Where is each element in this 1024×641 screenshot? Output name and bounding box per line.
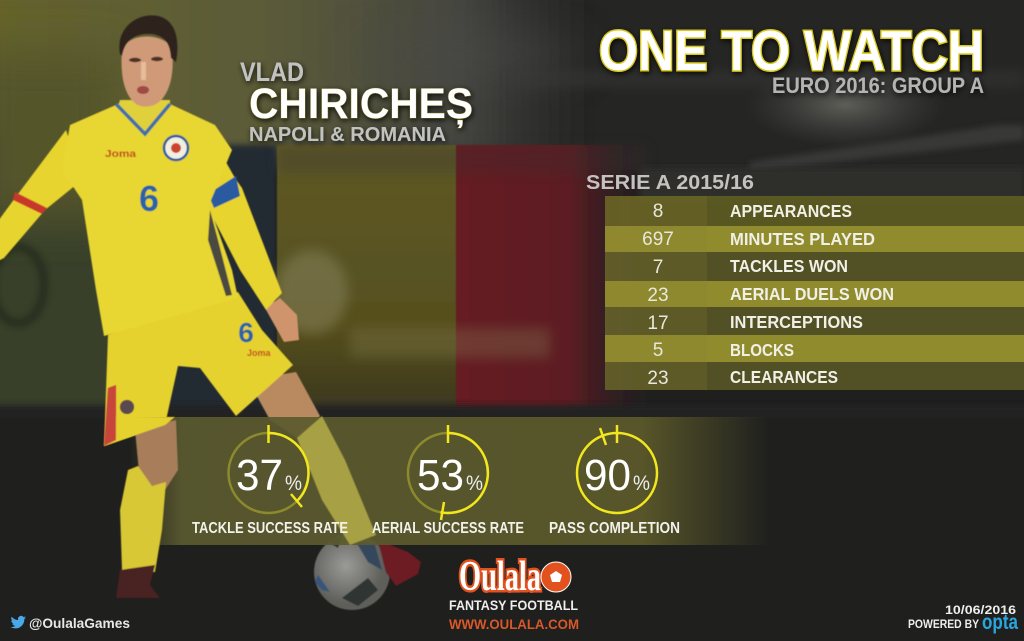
icon: twitter bird: [11, 616, 26, 628]
crest: [164, 136, 188, 160]
gauge: pass completion: PASS COMPLETION: [549, 520, 680, 537]
subtitle: EURO 2016: GROUP A: [772, 73, 984, 98]
surname: CHIRICHEȘ: [249, 80, 473, 128]
gauge: aerial success rate: AERIAL SUCCESS RATE: [372, 520, 524, 537]
stat labels: MINUTES PLAYED: [730, 229, 875, 249]
thigh: [135, 420, 178, 490]
tagline: FANTASY FOOTBALL: [449, 598, 578, 613]
logo football: [541, 562, 571, 592]
gauge: tackle success rate: 37: [236, 451, 283, 500]
far boot: [378, 540, 421, 586]
side panel: [208, 210, 232, 296]
gauge: aerial success rate: %: [466, 472, 483, 495]
boot: [116, 565, 160, 598]
stat values: 7: [653, 257, 663, 278]
stat values: 697: [642, 229, 674, 250]
stat labels: [730, 201, 894, 387]
gauge: pass completion: [549, 425, 680, 537]
gauge: tackle success rate: %: [285, 472, 302, 495]
shorts: [104, 292, 293, 446]
left arm: [0, 130, 82, 265]
captain armband: [208, 176, 240, 208]
gauge: pass completion: 90: [584, 451, 631, 500]
credits: [908, 603, 1018, 634]
stat labels: APPEARANCES: [730, 201, 852, 221]
shorts side stripe: [104, 385, 116, 446]
stat labels: AERIAL DUELS WON: [730, 284, 894, 304]
icon: football: [314, 534, 390, 610]
date: 10/06/2016: [945, 603, 1016, 617]
shirt number: 6: [139, 178, 159, 219]
logo wordmark: Oulala: [459, 554, 541, 600]
title: ONE TO WATCH: [599, 19, 984, 83]
shorts number: 6: [238, 317, 254, 348]
website: WWW.OULALA.COM: [449, 617, 579, 632]
stat labels: TACKLES WON: [730, 256, 848, 276]
shirt: [62, 104, 238, 336]
standing leg over band: [104, 385, 178, 598]
band behind success rates: [130, 417, 770, 545]
powered by: POWERED BY: [908, 619, 979, 631]
stat values: 23: [647, 285, 669, 306]
gauge: tackle success rate: [192, 425, 348, 537]
sleeve cuff stripe: [13, 192, 47, 214]
stat values: 23: [647, 368, 669, 389]
stat values: 8: [653, 201, 663, 222]
logo: Oulala Fantasy Football: [449, 554, 579, 632]
gauge: pass completion: %: [633, 472, 650, 495]
handle text: @OulalaGames: [29, 616, 130, 631]
first name: VLAD: [240, 57, 304, 87]
player name: [240, 57, 473, 146]
gauge: aerial success rate: 53: [417, 451, 464, 500]
panel: season stats table: [586, 172, 1024, 390]
stats rows: [605, 196, 1024, 390]
shorts brand: Joma: [247, 348, 272, 358]
stat values: 5: [653, 340, 663, 361]
club and country: NAPOLI & ROMANIA: [249, 124, 446, 146]
illustration: player: [0, 15, 421, 586]
gauge: tackle success rate: TACKLE SUCCESS RATE: [192, 520, 348, 537]
brand: Joma: [105, 149, 137, 160]
shorts crest: [120, 400, 134, 414]
stat labels: INTERCEPTIONS: [730, 312, 863, 332]
stat labels: CLEARANCES: [730, 367, 838, 387]
shorts hem: [104, 417, 175, 446]
extended sock under band tint: [297, 416, 376, 545]
twitter handle: [11, 616, 130, 631]
hand: [265, 298, 299, 342]
heading: Serie A 2015/16: SERIE A 2015/16: [586, 172, 754, 194]
gauge: aerial success rate: [372, 425, 524, 537]
sock: [120, 466, 166, 572]
stat values: 17: [647, 313, 669, 334]
extended leg: [248, 372, 320, 440]
neck and head: [116, 15, 177, 134]
stat values: [642, 201, 674, 389]
stat labels: BLOCKS: [730, 340, 794, 360]
right arm: [205, 125, 282, 310]
